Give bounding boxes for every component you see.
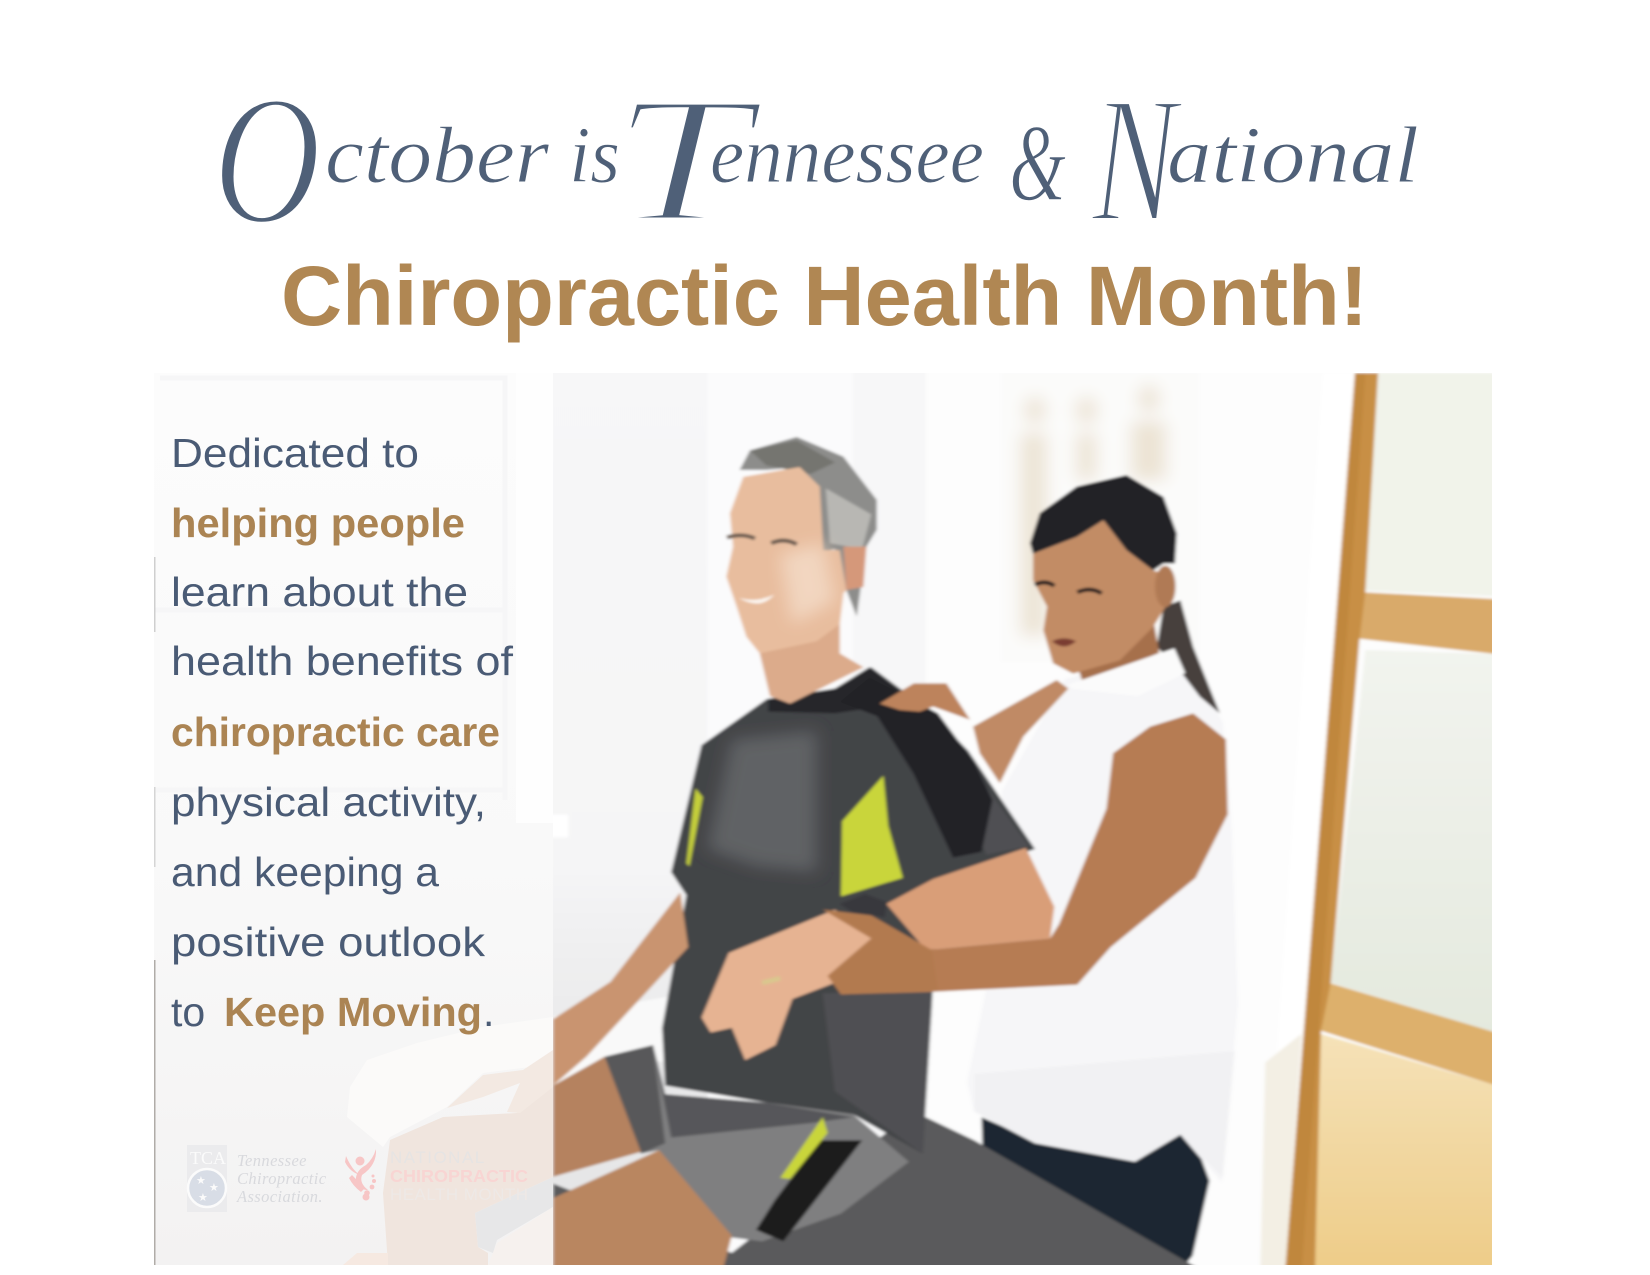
ponytail: [1157, 600, 1220, 713]
logo: Tennessee Chiropractic Association: TCA: [190, 1148, 226, 1168]
body text: learn about the: [171, 569, 468, 615]
logo icon: [345, 1149, 376, 1200]
panel: translucent text panel: [154, 373, 553, 1265]
ghost sheet: [347, 1017, 553, 1147]
man legs: [553, 1057, 641, 1177]
woman hair: [1030, 475, 1177, 570]
title: script line: N: [1060, 60, 1183, 259]
title: script line: is: [550, 112, 620, 200]
body text: helping people: [171, 500, 465, 546]
woman far arm: [973, 680, 1068, 783]
woman white shirt: [967, 650, 1238, 1182]
title: script line: &: [991, 102, 1066, 224]
panel window ghost lines: [155, 378, 505, 800]
logo: Tennessee Chiropractic Association: ★: [198, 1191, 208, 1204]
body text: .: [483, 989, 494, 1035]
man shirt: [662, 667, 1035, 1154]
title: bold line: Chiropractic Health Month!: [281, 249, 1368, 343]
body text: and keeping a: [171, 849, 439, 895]
logo: Tennessee Chiropractic Association: Tennessee: [237, 1151, 307, 1170]
logo: Tennessee Chiropractic Association: ★: [209, 1181, 219, 1194]
logo: Tennessee Chiropractic Association: [187, 1145, 327, 1212]
body text: [171, 430, 514, 1035]
man neck: [760, 618, 863, 704]
logo: Tennessee Chiropractic Association: Association.: [236, 1187, 323, 1206]
logo: National Chiropractic Health Month: HEALTH MONTH: [390, 1185, 528, 1204]
title: script line: T: [549, 60, 764, 259]
title: script line: O: [213, 58, 321, 263]
watch: [840, 894, 887, 917]
treatment bed: [553, 1112, 1202, 1270]
logo: National Chiropractic Health Month: CHIROPRACTIC: [390, 1166, 528, 1186]
logo: National Chiropractic Health Month: [345, 1148, 528, 1204]
title: script line: ennessee: [710, 112, 984, 200]
woman upper arm: [828, 713, 1228, 994]
logo: Tennessee Chiropractic Association: ★: [196, 1174, 206, 1187]
man forearm and hand: [702, 910, 871, 1060]
ghost bed: [475, 1177, 553, 1253]
woman face: [1033, 520, 1173, 674]
body text: positive outlook: [171, 919, 486, 965]
logo: Tennessee Chiropractic Association: Chiropractic: [237, 1169, 327, 1188]
ghost knee: [383, 1085, 553, 1265]
man hair: [740, 437, 877, 616]
woman neck: [1071, 618, 1159, 685]
title: script line: ational: [1167, 112, 1419, 200]
body text: health benefits of: [171, 638, 514, 684]
woman collar: [1068, 648, 1185, 696]
woman pants: [982, 1086, 1210, 1270]
body text: Keep Moving: [224, 989, 482, 1035]
body text: Dedicated to: [171, 430, 419, 476]
man shorts: [605, 1045, 909, 1241]
man upper arm: [886, 848, 1054, 950]
man face: [726, 467, 846, 653]
ghost hand: [447, 1050, 553, 1113]
man left arm: [553, 892, 688, 1086]
body text: chiropractic care: [171, 709, 500, 755]
body text: to: [171, 989, 205, 1035]
sheet behind man: [553, 996, 671, 1086]
ghost floor: [343, 1253, 388, 1265]
shorts strap: [756, 1140, 862, 1241]
woman hand on shoulder: [880, 683, 970, 720]
ghost lower thigh: [488, 1207, 553, 1265]
woman hand: [823, 910, 938, 994]
logo: National Chiropractic Health Month: NATIONAL: [390, 1148, 486, 1167]
body text: physical activity,: [171, 779, 486, 825]
title: script line: ctober: [325, 112, 550, 200]
photo: chiropractor assisting patient: [553, 373, 1492, 1265]
